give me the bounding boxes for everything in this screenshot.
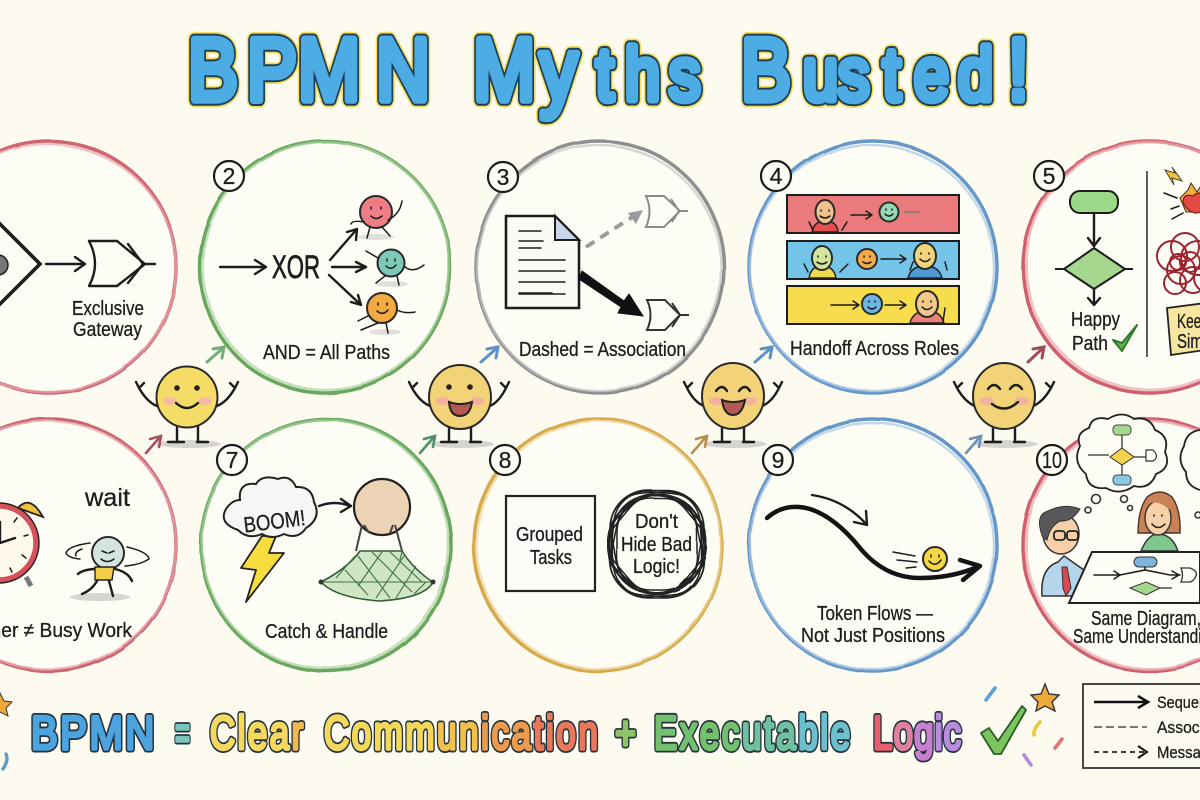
badge 7 <box>217 445 247 475</box>
equation: Logic <box>873 707 961 759</box>
boom cloud: BOOM! <box>242 505 307 538</box>
boom cloud <box>224 477 317 538</box>
happy path label: Happy <box>1071 309 1120 331</box>
title: B <box>720 21 791 119</box>
panel 10: shared understanding <box>1023 414 1200 671</box>
panel 2: XOR and AND <box>200 141 450 393</box>
bottom confetti left <box>0 693 12 769</box>
grey gateway <box>646 196 688 227</box>
woman <box>1138 492 1180 551</box>
note: keep it simple <box>1167 303 1200 355</box>
equation: + <box>615 706 636 759</box>
icon: document <box>506 216 579 308</box>
arrow: panel 6 to guide <box>146 436 161 453</box>
decision diamond <box>1055 248 1133 289</box>
panel 8: group boxes <box>474 419 722 671</box>
badge 8 <box>490 445 520 475</box>
label <box>801 603 945 647</box>
label: Gateway <box>73 319 142 341</box>
arrow: panel 8 to guide <box>692 436 707 453</box>
arrow: panel 7 to guide <box>420 436 435 453</box>
title: BPMN My <box>188 21 578 119</box>
icon: left gateway <box>0 220 40 308</box>
teal token <box>366 250 424 287</box>
panel 1: exclusive gateway <box>0 141 176 393</box>
arrow head grey <box>628 210 643 224</box>
grouped tasks box: Grouped <box>516 524 583 546</box>
label: Not Just Positions <box>801 625 945 647</box>
title: usted <box>803 33 993 116</box>
label: Exclusive <box>72 298 144 320</box>
arrow <box>46 257 85 271</box>
arrow in <box>220 260 266 274</box>
busy figure <box>66 537 149 601</box>
grouped tasks box: Tasks <box>530 547 572 569</box>
label: Catch & Handle <box>265 621 388 643</box>
ball <box>354 479 410 535</box>
label <box>1073 608 1200 648</box>
badge 2: 2 <box>223 163 235 189</box>
man <box>1039 506 1084 596</box>
badge 4 <box>761 161 791 191</box>
token <box>893 547 947 571</box>
thought cloud left <box>1077 414 1167 492</box>
legend <box>1083 684 1200 768</box>
arrow down <box>1088 213 1100 246</box>
black gateway <box>647 300 689 330</box>
scribble group <box>594 480 720 608</box>
grouped tasks box <box>506 496 595 591</box>
badge 9: 9 <box>772 447 784 473</box>
equation: Communication <box>324 707 598 759</box>
title: usted <box>803 33 993 116</box>
net <box>318 525 436 601</box>
title: ! <box>1008 21 1029 119</box>
equation: Clear <box>210 707 303 759</box>
orange token <box>358 293 415 335</box>
confetti right <box>986 688 1062 765</box>
title: usted <box>803 33 993 116</box>
panel 7: catch and handle <box>201 419 451 671</box>
star <box>1031 684 1059 711</box>
dashed arrow <box>586 212 640 247</box>
arrow <box>319 499 351 512</box>
title: ! <box>1008 21 1029 119</box>
badge 5: 5 <box>1043 163 1055 189</box>
lane red <box>787 195 959 233</box>
title: ! <box>1008 21 1029 119</box>
title: ths <box>596 33 700 116</box>
panel 4: handoff lanes <box>749 141 997 393</box>
divider <box>1146 171 1148 357</box>
badge 4: 4 <box>770 163 783 189</box>
equation: BPMN <box>31 708 154 760</box>
equation: Executable <box>654 707 850 759</box>
badge 2 <box>214 161 244 191</box>
equation: Logic <box>873 707 961 759</box>
icon: exclusive gateway <box>89 241 155 286</box>
icon: check <box>1113 325 1137 351</box>
label: AND = All Paths <box>263 342 390 364</box>
equation: = <box>175 706 190 759</box>
badge 3 <box>488 162 518 192</box>
badge 3: 3 <box>497 164 509 190</box>
thin arrow <box>812 495 867 525</box>
thought cloud right <box>1180 430 1200 490</box>
lane yellow <box>787 286 959 324</box>
warning text: Logic! <box>633 556 680 578</box>
guide 1 with arrow <box>136 347 238 448</box>
equation: Communication <box>324 707 598 759</box>
warning text <box>621 511 692 578</box>
pink token <box>351 196 402 240</box>
branch arrows <box>329 229 366 305</box>
equation: Clear <box>210 707 303 759</box>
label: Handoff Across Roles <box>790 338 959 360</box>
badge 9 <box>763 445 793 475</box>
panel 6: timer vs busy work <box>0 419 176 671</box>
badge 8: 8 <box>499 447 511 473</box>
arrow: panel 9 to guide <box>966 436 981 453</box>
thought bubbles <box>1085 494 1200 518</box>
equation: Executable <box>654 707 850 759</box>
guide 2 with arrow <box>409 347 509 448</box>
title: ths <box>596 33 700 116</box>
happy path label: Path <box>1072 333 1108 355</box>
label: Dashed = Association <box>519 339 686 361</box>
lightning <box>241 536 284 602</box>
equation: BPMN <box>31 708 154 760</box>
title: ths <box>596 33 700 116</box>
panel 3: association <box>476 141 724 393</box>
guide 4 with arrow <box>954 347 1054 448</box>
XOR text: XOR <box>272 249 320 285</box>
wait word: wait <box>84 484 130 512</box>
table with diagram <box>1069 552 1200 603</box>
icon: alarm clock <box>0 503 43 586</box>
guide 3 with arrow <box>684 347 782 448</box>
label: Token Flows — <box>817 603 933 625</box>
title <box>188 21 1029 119</box>
title: B <box>720 21 791 119</box>
happy path label <box>1071 309 1120 355</box>
title: BPMN My <box>188 21 578 119</box>
warning text: Don't <box>635 511 678 533</box>
lane blue <box>787 241 959 279</box>
legend: sequence flow <box>1094 693 1200 712</box>
equation: + <box>615 706 636 759</box>
curve arrowhead <box>960 560 980 580</box>
legend: message flow <box>1094 743 1200 762</box>
equation <box>31 706 961 760</box>
panel 9: token flow <box>749 419 997 671</box>
title: B <box>720 21 791 119</box>
panel 5: happy path <box>1023 141 1200 393</box>
scribble tangle <box>1157 233 1200 294</box>
label <box>72 298 144 341</box>
warning text: Hide Bad <box>621 534 692 556</box>
title: BPMN My <box>188 21 578 119</box>
flow: start event <box>1070 191 1118 213</box>
big check <box>981 706 1026 754</box>
bold arrow <box>579 271 643 316</box>
flow curve <box>767 507 975 578</box>
arrow down <box>1088 289 1100 305</box>
badge 7: 7 <box>226 447 238 473</box>
badge 10: 10 <box>1042 447 1062 473</box>
explosion <box>1164 167 1200 219</box>
equation: = <box>175 706 190 759</box>
badge 5 <box>1034 161 1064 191</box>
